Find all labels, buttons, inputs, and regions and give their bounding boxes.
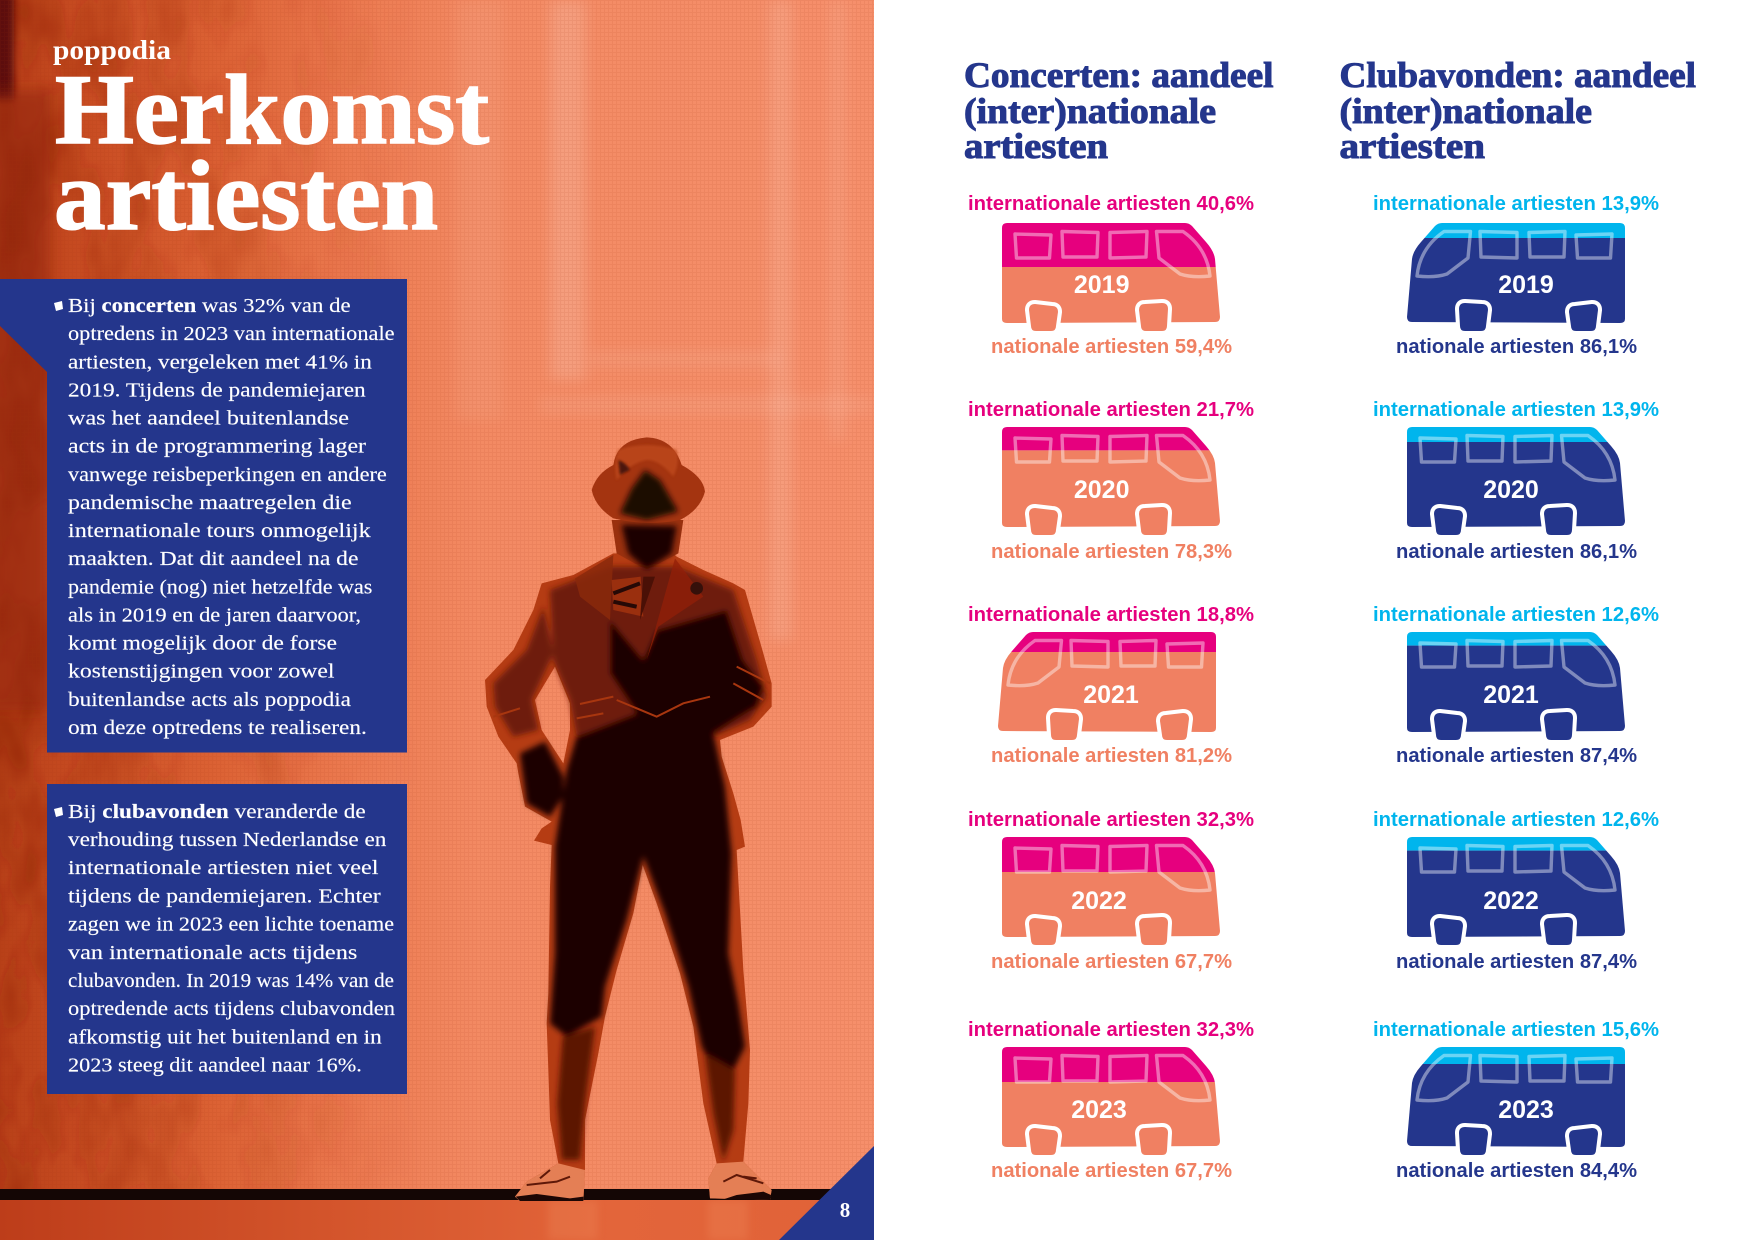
heading: concerten: (inter)nationale	[964, 91, 1216, 131]
chart: concerten 2022	[968, 809, 1254, 973]
chart: clubavonden 2019	[1373, 193, 1659, 358]
title: Herkomst artiesten: artiesten	[54, 140, 438, 251]
body text: concerten: was het aandeel buitenlandse	[68, 408, 349, 430]
body text: concerten: acts in de programmering lager	[68, 436, 366, 458]
body text: concerten: optredens in 2023 van internationale	[68, 323, 395, 345]
chart: concerten 2021	[968, 604, 1254, 767]
body text: concerten: pandemie (nog) niet hetzelfde was	[68, 576, 372, 598]
body text: clubavonden: tijdens de pandemiejaren. Echter	[68, 885, 381, 907]
text panel: clubavonden	[47, 784, 407, 1094]
chart: concerten 2020: internationale artiesten 21,7%	[968, 399, 1254, 421]
chart: clubavonden 2023: nationale artiesten 84,4%	[1396, 1160, 1637, 1182]
chart: clubavonden 2023: 2023	[1498, 1096, 1554, 1124]
chart: concerten 2019: internationale artiesten 40,6%	[968, 193, 1254, 215]
title: Herkomst artiesten: Herkomst	[55, 54, 489, 165]
body text: concerten: maakten. Dat dit aandeel na de	[68, 548, 358, 570]
text panel: concerten	[0, 279, 407, 752]
body text: clubavonden: internationale artiesten niet veel	[68, 857, 379, 879]
photo panel: singer on stage	[0, 0, 874, 1240]
icon: bullet	[54, 807, 63, 817]
page number corner: 8	[840, 1198, 850, 1222]
chart: clubavonden 2023: internationale artiesten 15,6%	[1373, 1019, 1659, 1041]
chart: clubavonden 2021	[1373, 604, 1659, 767]
heading: clubavonden	[1340, 55, 1696, 166]
icon: bullet	[54, 301, 63, 311]
chart: clubavonden 2019: internationale artiesten 13,9%	[1373, 193, 1659, 215]
chart: concerten 2022: internationale artiesten 32,3%	[968, 809, 1254, 831]
chart: concerten 2023	[968, 1019, 1254, 1182]
chart: clubavonden 2021: 2021	[1483, 681, 1539, 709]
chart: concerten 2020: nationale artiesten 78,3%	[991, 541, 1232, 563]
chart: concerten 2023: internationale artiesten 32,3%	[968, 1019, 1254, 1041]
chart: clubavonden 2021: internationale artiesten 12,6%	[1373, 604, 1659, 626]
chart: clubavonden 2020: 2020	[1483, 476, 1539, 504]
body text: clubavonden: clubavonden. In 2019 was 14% van de	[68, 970, 394, 992]
figure: man with hat silhouette	[485, 437, 772, 1201]
chart: clubavonden 2022: nationale artiesten 87,4%	[1396, 951, 1637, 973]
chart: concerten 2022: 2022	[1071, 887, 1127, 915]
body text: concerten: artiesten, vergeleken met 41% in	[68, 351, 372, 373]
body text: clubavonden	[68, 801, 395, 1077]
body text: concerten: als in 2019 en de jaren daarvoor,	[68, 604, 361, 626]
chart: clubavonden 2022	[1373, 809, 1659, 973]
heading: clubavonden: (inter)nationale	[1340, 91, 1592, 131]
body text: concerten: buitenlandse acts als poppodia	[68, 689, 351, 711]
chart: concerten 2021: nationale artiesten 81,2%	[991, 745, 1232, 767]
page number corner	[779, 1146, 874, 1240]
body text: concerten: internationale tours onmogelijk	[68, 520, 372, 542]
heading: concerten: Concerten: aandeel	[964, 55, 1274, 95]
chart: concerten 2022: nationale artiesten 67,7%	[991, 951, 1232, 973]
chart: concerten 2021: 2021	[1083, 681, 1139, 709]
chart: concerten 2019: nationale artiesten 59,4%	[991, 336, 1232, 358]
title: Herkomst artiesten	[54, 54, 489, 251]
body text: clubavonden: afkomstig uit het buitenland en in	[68, 1026, 382, 1048]
body text: clubavonden: verhouding tussen Nederlandse en	[68, 829, 386, 851]
page label: poppodia: poppodia	[53, 35, 172, 65]
body text: concerten: om deze optredens te realiseren.	[68, 717, 367, 739]
chart: clubavonden 2019: 2019	[1498, 271, 1554, 299]
heading: concerten	[964, 55, 1274, 166]
chart: clubavonden 2021: nationale artiesten 87,4%	[1396, 745, 1637, 767]
body text: concerten: 2019. Tijdens de pandemiejaren	[68, 379, 366, 401]
body text: concerten: kostenstijgingen voor zowel	[68, 661, 335, 683]
chart: concerten 2019: 2019	[1074, 271, 1130, 299]
chart: concerten 2023: 2023	[1071, 1096, 1127, 1124]
chart: clubavonden 2023	[1373, 1019, 1659, 1182]
body text: clubavonden: 2023 steeg dit aandeel naar 16%.	[68, 1055, 362, 1077]
chart: concerten 2020	[968, 399, 1254, 563]
body text: clubavonden: Bij clubavonden veranderde de	[68, 801, 366, 823]
body text: concerten: pandemische maatregelen die	[68, 492, 352, 514]
body text: concerten: vanwege reisbeperkingen en andere	[68, 464, 387, 486]
body text: clubavonden: optredende acts tijdens clubavonden	[68, 998, 395, 1020]
chart: clubavonden 2020: internationale artiesten 13,9%	[1373, 399, 1659, 421]
chart: clubavonden 2020: nationale artiesten 86,1%	[1396, 541, 1637, 563]
chart: concerten 2023: nationale artiesten 67,7%	[991, 1160, 1232, 1182]
chart: clubavonden 2022: 2022	[1483, 887, 1539, 915]
chart: concerten 2021: internationale artiesten 18,8%	[968, 604, 1254, 626]
body text: concerten	[68, 295, 395, 739]
chart: clubavonden 2020	[1373, 399, 1659, 563]
chart: clubavonden 2022: internationale artiesten 12,6%	[1373, 809, 1659, 831]
heading: concerten: artiesten	[964, 126, 1108, 166]
heading: clubavonden: artiesten	[1340, 126, 1485, 166]
body text: concerten: komt mogelijk door de forse	[68, 633, 337, 655]
shoes	[515, 1162, 772, 1201]
chart: clubavonden 2019: nationale artiesten 86,1%	[1396, 336, 1637, 358]
chart: concerten 2020: 2020	[1074, 476, 1130, 504]
chart: concerten 2019	[968, 193, 1254, 358]
body text: concerten: Bij concerten was 32% van de	[68, 295, 351, 317]
body text: clubavonden: van internationale acts tijdens	[68, 942, 357, 964]
heading: clubavonden: Clubavonden: aandeel	[1340, 55, 1696, 95]
body text: clubavonden: zagen we in 2023 een lichte toename	[68, 914, 394, 936]
icon: hat	[592, 437, 705, 523]
